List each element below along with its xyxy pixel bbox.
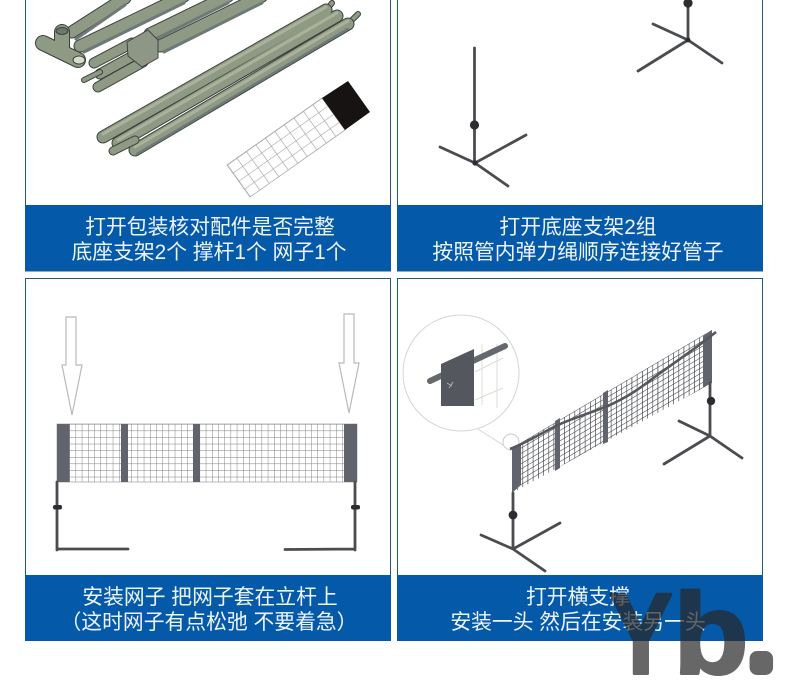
- caption text step 2: 打开底座支架2组: [499, 216, 657, 239]
- panel: step 1 unpack and check parts: [25, 0, 391, 271]
- caption bar step 1: [25, 205, 391, 271]
- illustration: left post and foot: [53, 482, 128, 550]
- illustration: right base stand: [638, 0, 722, 71]
- watermark: Yb. logo: .: [753, 614, 770, 680]
- panel: step 3 fit the net: [25, 278, 391, 641]
- caption bar step 4: [397, 575, 763, 641]
- panel: step 2 open base stands: [397, 0, 763, 271]
- illustration: front view net: [57, 424, 357, 482]
- illustration: right assembled stand: [664, 383, 742, 464]
- watermark: Yb. logo: [609, 570, 770, 691]
- illustration: folded net mesh: [227, 98, 345, 197]
- illustration: left base stand: [440, 48, 526, 186]
- caption text step 4: 打开横支撑: [526, 586, 630, 609]
- caption bar step 2: [397, 205, 763, 271]
- caption text step 3: （这时网子有点松弛 不要着急）: [61, 611, 357, 634]
- caption text step 2: 按照管内弹力绳顺序连接好管子: [432, 241, 724, 264]
- illustration: short pipes and connectors: [43, 0, 262, 87]
- caption text step 1: 打开包装核对配件是否完整: [85, 216, 335, 239]
- caption bar step 3: [25, 575, 391, 641]
- caption text step 3: 安装网子 把网子套在立杆上: [82, 586, 338, 609]
- illustration: long pipe bundle: [103, 3, 358, 154]
- panel: step 4 install crossbar: [397, 278, 763, 641]
- illustration: black net band: [322, 81, 370, 130]
- arrow: left down arrow: [62, 317, 82, 415]
- illustration: right post and foot: [285, 482, 360, 550]
- caption text step 4: 安装一头 然后在安装另一头: [450, 611, 706, 634]
- arrow: right down arrow: [339, 314, 359, 413]
- caption text step 1: 底座支架2个 撑杆1个 网子1个: [71, 241, 347, 264]
- illustration: detail magnifier circle: [403, 315, 519, 450]
- illustration: left assembled stand: [481, 493, 560, 571]
- illustration: net in perspective: [510, 330, 716, 493]
